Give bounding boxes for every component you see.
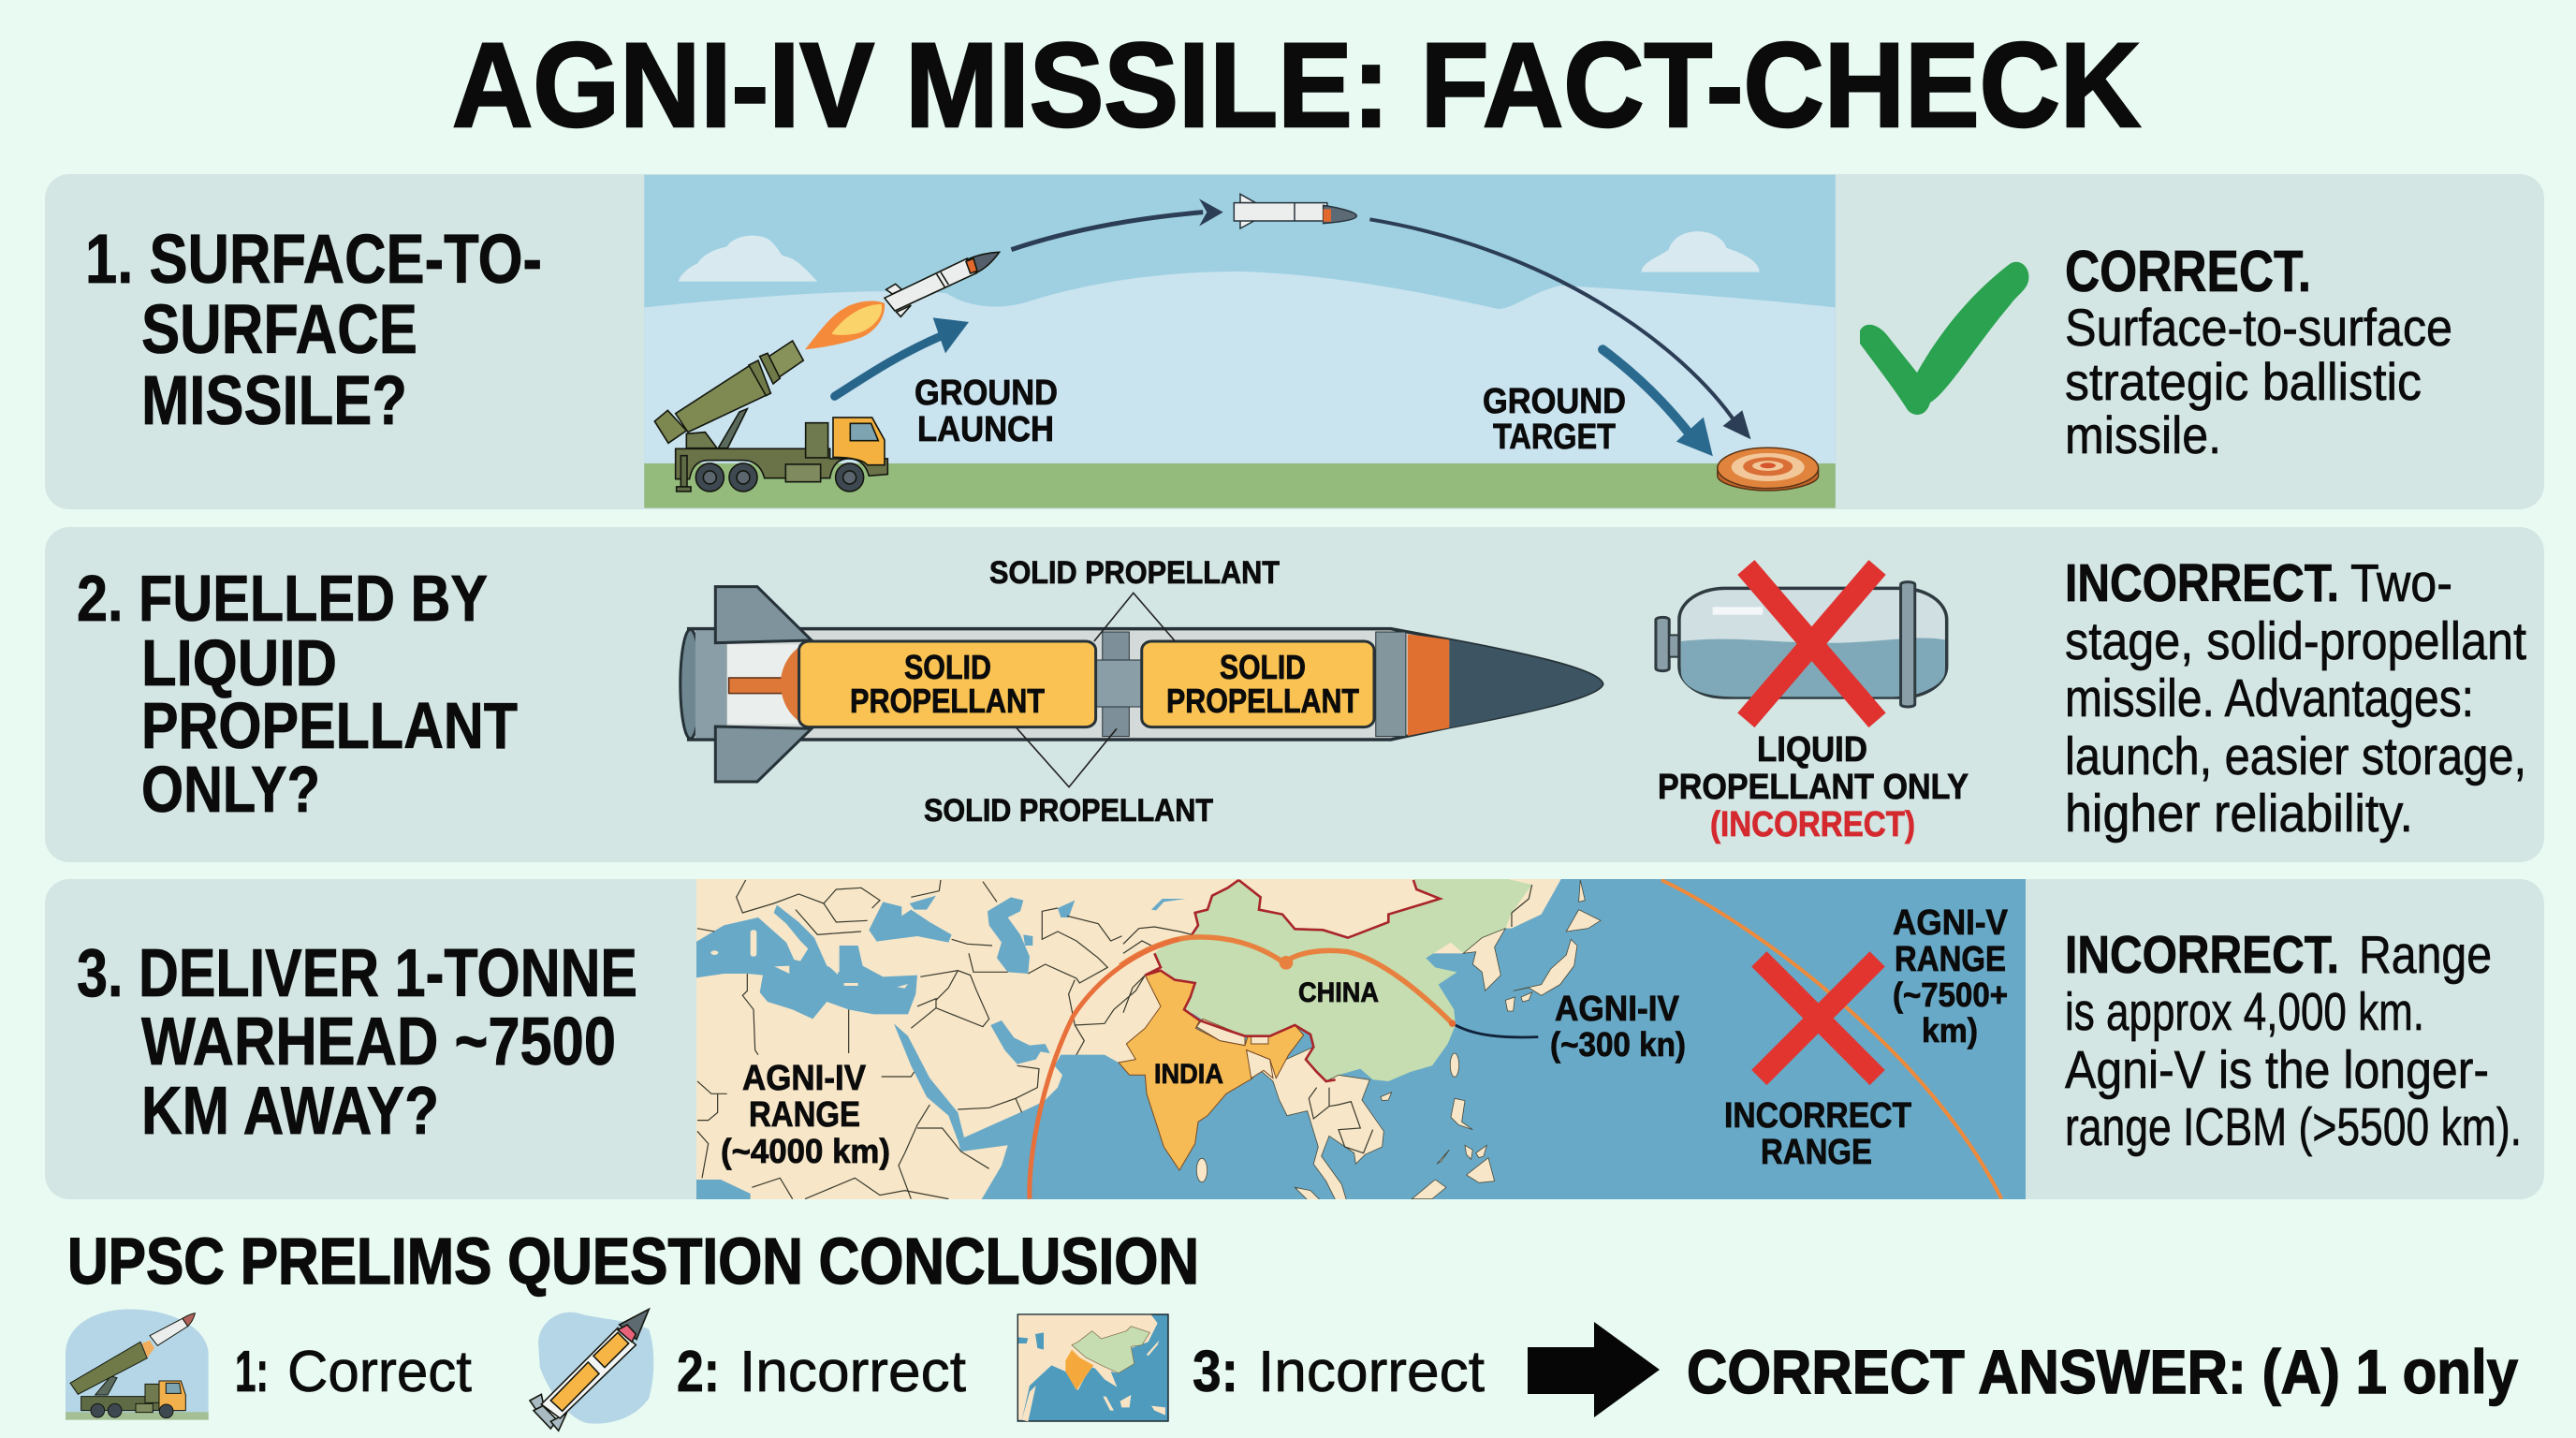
map labels: AGNI-IV: [742, 1059, 867, 1098]
icon: launcher truck: [654, 341, 887, 492]
question 2 heading: PROPELLANT: [141, 689, 518, 762]
answer text: question 2: INCORRECT.: [2065, 553, 2339, 613]
labels: solid propellant: SOLID PROPELLANT: [924, 793, 1213, 829]
label: ground target: [1483, 382, 1626, 457]
fins: [715, 587, 812, 782]
labels: solid propellant: SOLID: [904, 648, 991, 686]
labels: solid propellant: SOLID PROPELLANT: [989, 555, 1280, 591]
text: statement 1 correct: Correct: [287, 1340, 472, 1404]
stage 2 propellant block: [1142, 641, 1374, 727]
leader line: [1456, 1025, 1538, 1037]
text: correct answer: CORRECT ANSWER: (A) 1 only: [1687, 1337, 2518, 1406]
answer text: question 1: Surface-to-surface: [2065, 298, 2452, 357]
map labels: CHINA: [1298, 977, 1379, 1008]
label: ground launch: GROUND: [915, 374, 1058, 413]
map labels: INCORRECT: [1724, 1096, 1911, 1136]
answer text: question 1: [2065, 240, 2452, 464]
answer text: question 2: Two-: [2350, 553, 2452, 613]
callout lines: [1017, 593, 1175, 787]
answer text: question 2: higher reliability.: [2065, 784, 2413, 844]
answer text: question 1: strategic ballistic: [2065, 352, 2422, 411]
question 3 heading: 3. DELIVER 1-TONNE: [77, 936, 637, 1011]
red x: incorrect range: [1759, 959, 1878, 1078]
map labels: (~7500+: [1893, 976, 2008, 1014]
question 2 heading: [77, 562, 518, 826]
text: statement 3 incorrect: 3:: [1193, 1340, 1238, 1404]
answer text: question 3: Range: [2359, 925, 2492, 985]
question 3 heading: WARHEAD ~7500: [141, 1005, 616, 1079]
label: liquid propellant only incorrect: PROPELLANT ONLY: [1658, 768, 1969, 807]
answer text: question 3: Agni-V is the longer-: [2065, 1040, 2489, 1100]
title: AGNI-IV MISSILE: FACT-CHECK: [452, 19, 2141, 153]
stage 1 propellant block: [799, 641, 1096, 727]
question 1 heading: MISSILE?: [141, 361, 407, 439]
map labels: AGNI-IV: [1555, 990, 1680, 1029]
map: missile range over Asia: [693, 875, 2026, 1200]
korea, japan and islands: [1196, 880, 1601, 1200]
labels: solid propellant: PROPELLANT: [850, 682, 1045, 720]
answer text: question 2: [2065, 553, 2526, 844]
icon: solid missile thumbnail: [530, 1309, 653, 1431]
labels: solid propellant: [850, 555, 1359, 829]
answer text: question 1: missile.: [2065, 405, 2221, 464]
icon: left cloud: [679, 236, 817, 282]
illustration: launch trajectory scene: [644, 175, 1836, 508]
map labels: RANGE: [749, 1095, 860, 1135]
question 1 heading: [85, 220, 542, 439]
panel: question 1 surface-to-surface: [45, 174, 2544, 509]
illustration: two-stage solid missile cutaway: [681, 587, 1603, 787]
icon: rising missile: [885, 252, 1000, 316]
question 2 heading: LIQUID: [141, 626, 337, 699]
question 2 heading: ONLY?: [141, 753, 320, 826]
conclusion heading: UPSC PRELIMS QUESTION CONCLUSION: [67, 1225, 1199, 1298]
map labels: [721, 903, 2009, 1172]
answer text: question 2: missile. Advantages:: [2065, 668, 2474, 728]
text: statement 2 incorrect: 2:: [677, 1340, 720, 1404]
icon: map thumbnail: [1017, 1314, 1168, 1421]
icon: truck launcher thumbnail: [66, 1309, 209, 1420]
question 3 heading: [77, 936, 637, 1149]
arrow: launch direction: [835, 317, 969, 396]
label: liquid propellant only incorrect: LIQUID: [1757, 730, 1867, 770]
answer text: question 2: stage, solid-propellant: [2065, 611, 2526, 671]
icon: exhaust flame: [805, 301, 885, 349]
arrow: ascending trajectory: [1011, 198, 1223, 250]
question 3 heading: KM AWAY?: [141, 1074, 439, 1149]
arrow: target direction: [1603, 349, 1713, 456]
label: ground launch: LAUNCH: [917, 410, 1054, 449]
agni-v range arc: [1661, 880, 2001, 1199]
map labels: INDIA: [1154, 1059, 1223, 1090]
answer text: question 3: [2065, 925, 2522, 1157]
text: statement 2 incorrect: Incorrect: [739, 1340, 966, 1404]
india: [1119, 971, 1304, 1170]
map labels: (~300 kn): [1550, 1025, 1686, 1064]
question 2 heading: 2. FUELLED BY: [77, 562, 488, 635]
map labels: AGNI-V: [1893, 903, 2009, 943]
china: [1154, 878, 1532, 1081]
question 1 heading: 1. SURFACE-TO-: [85, 220, 542, 298]
map labels: RANGE: [1895, 940, 2006, 979]
agni-iv western range arc: [1030, 939, 1179, 1199]
label: ground launch: [915, 374, 1058, 449]
agni-iv range arc: [1120, 937, 1456, 1027]
icon: cruising missile: [1234, 194, 1356, 228]
arrow: to correct answer: [1528, 1322, 1660, 1417]
panel: question 2 propellant: [45, 527, 2544, 862]
icon: ground target: [1718, 448, 1819, 491]
southeast asia and bangladesh: [1251, 1047, 1383, 1200]
label: ground target: GROUND: [1483, 382, 1626, 421]
labels: solid propellant: PROPELLANT: [1166, 682, 1359, 720]
arrow: descending trajectory: [1369, 219, 1750, 439]
panel: question 3 range: [45, 875, 2544, 1200]
answer text: question 3: is approx 4,000 km.: [2065, 982, 2424, 1042]
text: statement 1 correct: 1:: [235, 1340, 269, 1404]
labels: solid propellant: SOLID: [1220, 648, 1306, 686]
map labels: (~4000 km): [721, 1132, 890, 1170]
china border: [1145, 880, 1440, 1081]
conclusion section: [66, 1225, 2518, 1431]
answer text: question 3: INCORRECT.: [2065, 925, 2339, 985]
icon: green check mark: [1860, 262, 2028, 415]
icon: liquid tank crossed out: [1656, 567, 1947, 720]
map west: Europe, Africa, Middle East: [693, 875, 1192, 1200]
map labels: km): [1922, 1011, 1978, 1049]
question 1 heading: SURFACE: [141, 290, 417, 368]
text: statement 3 incorrect: Incorrect: [1258, 1340, 1485, 1404]
answer text: question 1: CORRECT.: [2065, 240, 2311, 304]
map east: India, China, East Asia: [1117, 875, 1601, 1200]
map labels: RANGE: [1761, 1133, 1872, 1172]
label: liquid propellant only incorrect: (INCORRECT): [1710, 805, 1915, 844]
label: ground target: TARGET: [1493, 418, 1616, 457]
label: liquid propellant only incorrect: [1658, 730, 1969, 844]
